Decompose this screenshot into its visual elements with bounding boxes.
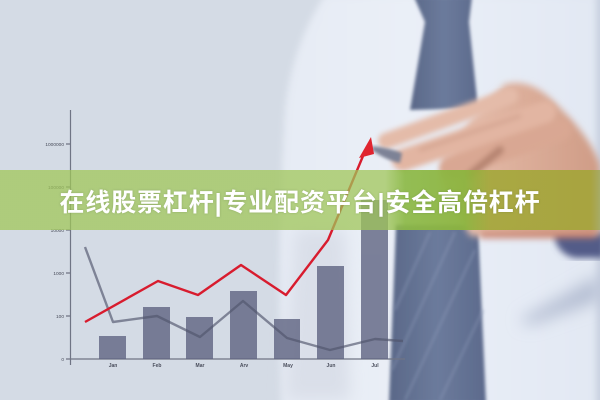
y axis labels: 100 (56, 314, 64, 320)
red trend line with arrow (85, 137, 374, 322)
month labels: Feb (153, 363, 161, 369)
month labels: Jan (109, 363, 117, 369)
y axis labels (45, 142, 64, 363)
bars (99, 200, 388, 359)
chart axes (66, 110, 405, 365)
y axis labels: 1000 (53, 271, 64, 277)
month labels: Arv (240, 363, 248, 369)
month labels: Mar (196, 363, 204, 369)
green title banner (0, 170, 600, 230)
grey trend line (85, 247, 403, 350)
month labels: May (283, 363, 293, 369)
month labels: Jul (371, 363, 379, 369)
month labels (109, 363, 379, 369)
month labels: Jun (327, 363, 335, 369)
y axis labels: 0 (61, 357, 64, 363)
y axis labels: 100000 (48, 185, 64, 191)
title: 在线股票杠杆|专业配资平台|安全高倍杠杆 (60, 189, 540, 217)
y axis labels: 1000000 (45, 142, 64, 148)
y axis labels: 10000 (51, 228, 64, 234)
